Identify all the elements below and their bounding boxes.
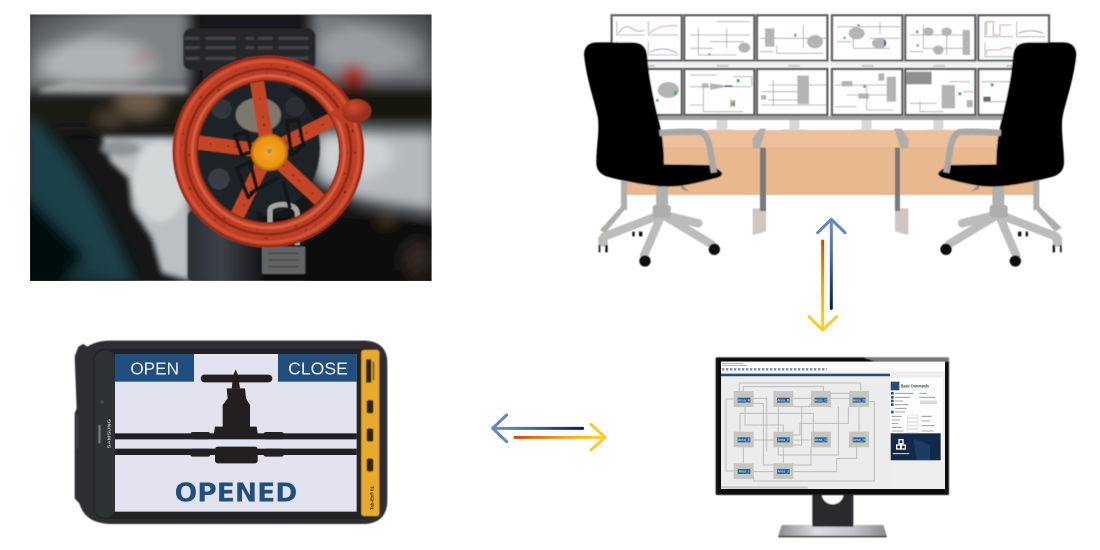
network diagram: Area_D bbox=[853, 398, 866, 402]
network diagram: Area_H bbox=[853, 438, 866, 442]
tablet body bbox=[75, 341, 387, 524]
valve body and flange bbox=[183, 18, 320, 281]
close button bbox=[278, 354, 357, 382]
network diagram: Area_F bbox=[777, 438, 790, 442]
padlock bbox=[262, 204, 305, 274]
network diagram: Area_A bbox=[738, 398, 751, 402]
video wall of twelve monitors bbox=[610, 15, 1050, 134]
close button: CLOSE bbox=[288, 359, 348, 379]
network diagram: Area_I bbox=[739, 470, 749, 474]
right chair bbox=[938, 42, 1076, 267]
trend curves bbox=[618, 22, 1043, 55]
monitor bezel bbox=[716, 357, 949, 495]
left chair bbox=[584, 42, 722, 267]
control room scene with operator chairs bbox=[584, 15, 1076, 267]
chain bbox=[235, 120, 303, 208]
network diagram: Area_C bbox=[815, 398, 828, 402]
process diagrams on screens bbox=[617, 22, 1045, 112]
arrows: control room to desktop monitor bbox=[809, 219, 845, 330]
basic commands panel bbox=[890, 378, 943, 461]
rugged tablet showing valve state bbox=[75, 341, 387, 524]
network diagram: Area_E bbox=[738, 438, 751, 442]
basic commands panel: Basic Commands bbox=[901, 383, 929, 388]
network diagram: Area_G bbox=[815, 438, 827, 442]
monitor stands bbox=[707, 120, 955, 134]
orange hub bbox=[251, 134, 288, 171]
monitor frames bbox=[612, 15, 1049, 115]
open button: OPEN bbox=[130, 359, 179, 379]
desk legs and brackets bbox=[600, 129, 1062, 235]
tablet screen bbox=[115, 354, 357, 512]
desk bbox=[600, 129, 1062, 235]
photo: red locked valve handwheel bbox=[23, 8, 437, 285]
vendor banner with logo bbox=[891, 433, 941, 460]
toolbar bbox=[721, 362, 945, 376]
desktop monitor with network diagram software bbox=[716, 357, 949, 537]
handwheel bbox=[174, 57, 371, 246]
network diagram bbox=[721, 376, 890, 489]
open button bbox=[115, 354, 194, 382]
rugged tablet showing valve state: Tab-Ex® 01 bbox=[370, 485, 375, 510]
network diagram: Area_B bbox=[777, 398, 790, 402]
arrows: tablet to desktop monitor bbox=[493, 415, 605, 450]
monitor stand bbox=[778, 494, 888, 538]
application window bbox=[721, 362, 945, 489]
status label: OPENED bbox=[175, 478, 297, 508]
valve silhouette bbox=[115, 369, 357, 463]
device brand text: SAMSUNG bbox=[106, 419, 112, 448]
network diagram: Area_J bbox=[778, 470, 789, 474]
